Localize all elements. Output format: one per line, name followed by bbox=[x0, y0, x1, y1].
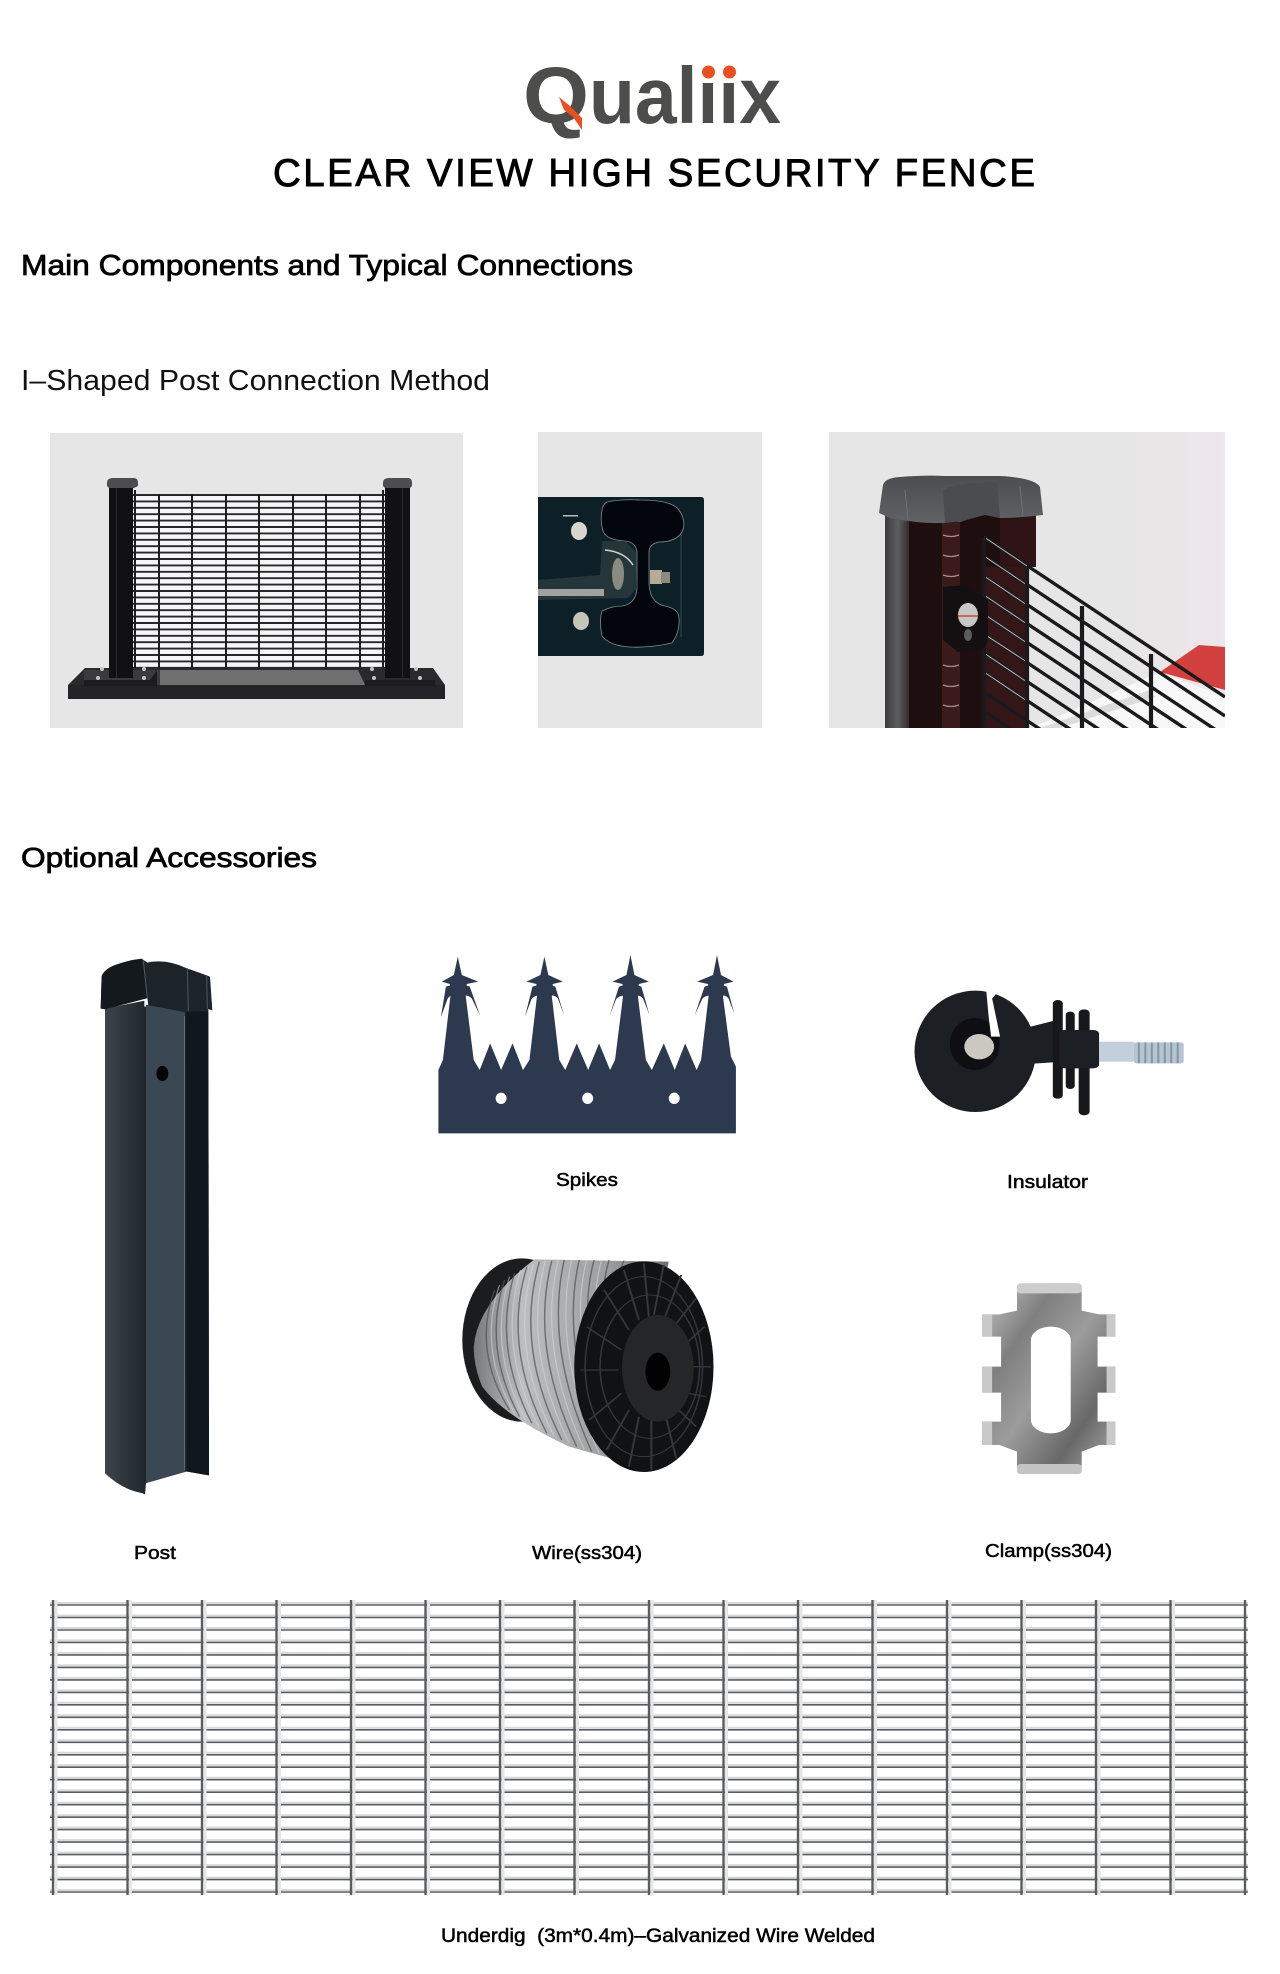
right post bbox=[383, 478, 412, 678]
heading: main components: Main Components and Typical Connections bbox=[21, 250, 633, 282]
red background object bbox=[1031, 645, 1225, 728]
panel: fence assembly photo bbox=[50, 433, 463, 728]
heading: optional accessories: Optional Accessories bbox=[21, 842, 317, 873]
panel: post top with mesh photo bbox=[829, 432, 1225, 728]
mesh panel bbox=[133, 490, 385, 680]
post cap bbox=[879, 476, 1043, 523]
label: insulator: Insulator bbox=[1007, 1171, 1088, 1192]
base plate bbox=[68, 667, 445, 699]
accessory: post bbox=[101, 959, 212, 1494]
label: post: Post bbox=[134, 1542, 176, 1563]
accessory: spikes bbox=[438, 955, 736, 1133]
label: underdig: Underdig (3m*0.4m)–Galvanized Wire Welded bbox=[441, 1925, 875, 1947]
subheading: connection method: I–Shaped Post Connection Method bbox=[21, 365, 490, 397]
black plate bbox=[538, 497, 704, 656]
logo: Qualiix: Q bbox=[523, 51, 589, 140]
accessory: insulator bbox=[915, 989, 1184, 1115]
post body bbox=[885, 515, 1036, 728]
label: wire: Wire(ss304) bbox=[532, 1542, 642, 1563]
left post bbox=[107, 478, 138, 678]
logo: Qualiix: ualiix bbox=[589, 51, 781, 140]
label: spikes: Spikes bbox=[556, 1169, 618, 1190]
accessory: wire spool bbox=[462, 1258, 714, 1472]
title: CLEAR VIEW HIGH SECURITY FENCE bbox=[273, 152, 1035, 195]
accessory: clamp bbox=[982, 1283, 1116, 1474]
panel: I-post cross section photo bbox=[538, 432, 762, 728]
clamp and bolt bbox=[943, 585, 988, 652]
screws bbox=[571, 522, 589, 630]
I-shaped post opening bbox=[600, 500, 684, 647]
mesh wires bbox=[984, 536, 1225, 728]
underdig welded wire mesh bbox=[50, 1600, 1248, 1895]
label: clamp: Clamp(ss304) bbox=[985, 1540, 1112, 1561]
connecting arm and bolt bbox=[538, 541, 670, 600]
